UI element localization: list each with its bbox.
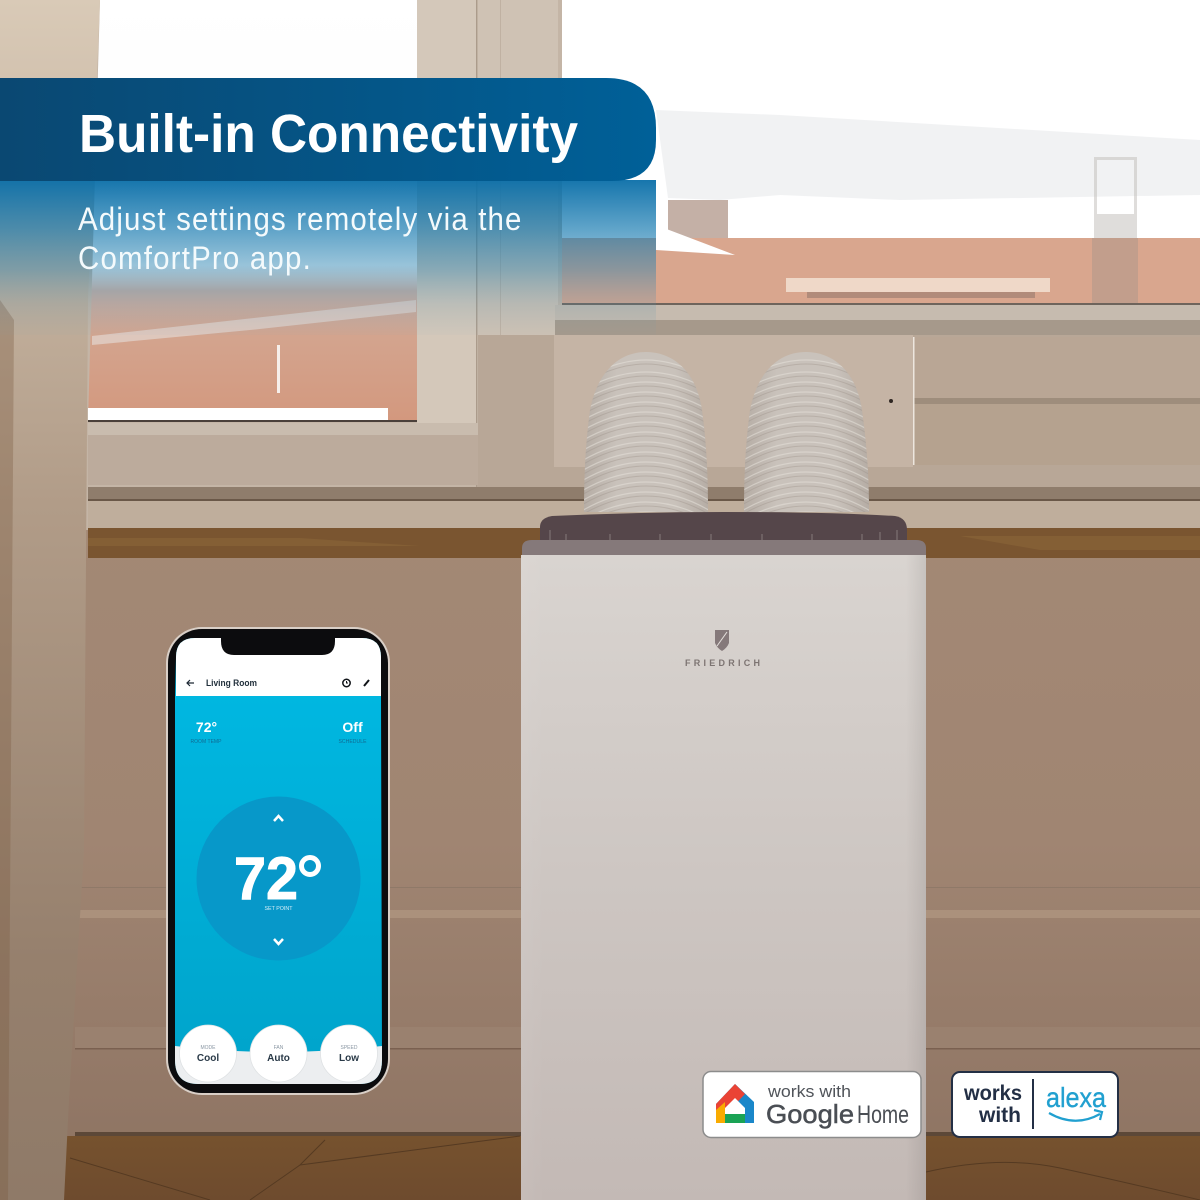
badge: works with Alexa: works: [963, 1082, 1022, 1105]
curtain: [0, 0, 100, 1200]
schedule: [338, 719, 367, 745]
subtitle text: [78, 201, 521, 276]
schedule: SCHEDULE: [338, 739, 367, 745]
badge: works with Alexa: with: [978, 1104, 1021, 1127]
wood floor: [60, 1136, 1200, 1200]
hose: left: [584, 352, 708, 512]
set point dial: [196, 796, 360, 960]
exhaust hoses: [584, 352, 869, 512]
app header: [176, 638, 381, 696]
window pane: right: [562, 0, 1200, 305]
room temp: 72°: [196, 719, 217, 735]
mode button: MODE: [200, 1045, 216, 1051]
set point dial: 72: [234, 845, 298, 912]
logo wordmark: FRIEDRICH: [685, 658, 760, 668]
window insert panel: [554, 335, 1200, 467]
speed button: Low: [339, 1053, 359, 1064]
window frame: [85, 0, 1200, 530]
bottom tray: [175, 1046, 382, 1084]
mode button: [180, 1025, 236, 1082]
unit body: [521, 555, 926, 1200]
subtitle text: ComfortPro app.: [78, 240, 311, 276]
blue gradient overlay: [0, 180, 656, 335]
set point dial: SET POINT: [264, 906, 292, 912]
phone body: [166, 627, 390, 1095]
heading: Built-in Connectivity: [79, 104, 578, 164]
phone app mockup: [166, 627, 390, 1095]
schedule: Off: [342, 719, 363, 735]
speed button: SPEED: [341, 1045, 358, 1051]
skirting moulding: [75, 887, 1200, 1136]
badge: works with Alexa: alexa: [1046, 1082, 1106, 1113]
badge: works with Google Home: [703, 1072, 921, 1138]
portable air conditioner: [521, 512, 926, 1200]
fan button: Auto: [267, 1053, 290, 1064]
subtitle text: Adjust settings remotely via the: [78, 201, 521, 237]
grey band: [522, 540, 926, 556]
badge: works with Google Home: Google: [766, 1099, 854, 1129]
room temp: [190, 719, 222, 745]
top cap: [540, 512, 907, 540]
icon: Google Home house: [716, 1084, 754, 1123]
logo shield: [715, 630, 729, 651]
hose: right: [744, 352, 869, 512]
app header: Living Room: [206, 678, 257, 688]
badge: works with Google Home: Home: [857, 1101, 909, 1129]
room temp: ROOM TEMP: [190, 739, 222, 745]
window sill: [88, 528, 1200, 558]
fan button: [250, 1025, 307, 1082]
badge: works with Google Home: works with: [767, 1082, 851, 1101]
fan button: FAN: [274, 1045, 284, 1051]
screen: [175, 638, 382, 1084]
title bar: [0, 78, 656, 181]
badge: works with Alexa: [952, 1072, 1118, 1137]
speed button: [320, 1025, 378, 1082]
notch: [221, 638, 335, 655]
window pane: left: [88, 0, 417, 422]
mode button: Cool: [197, 1053, 219, 1064]
